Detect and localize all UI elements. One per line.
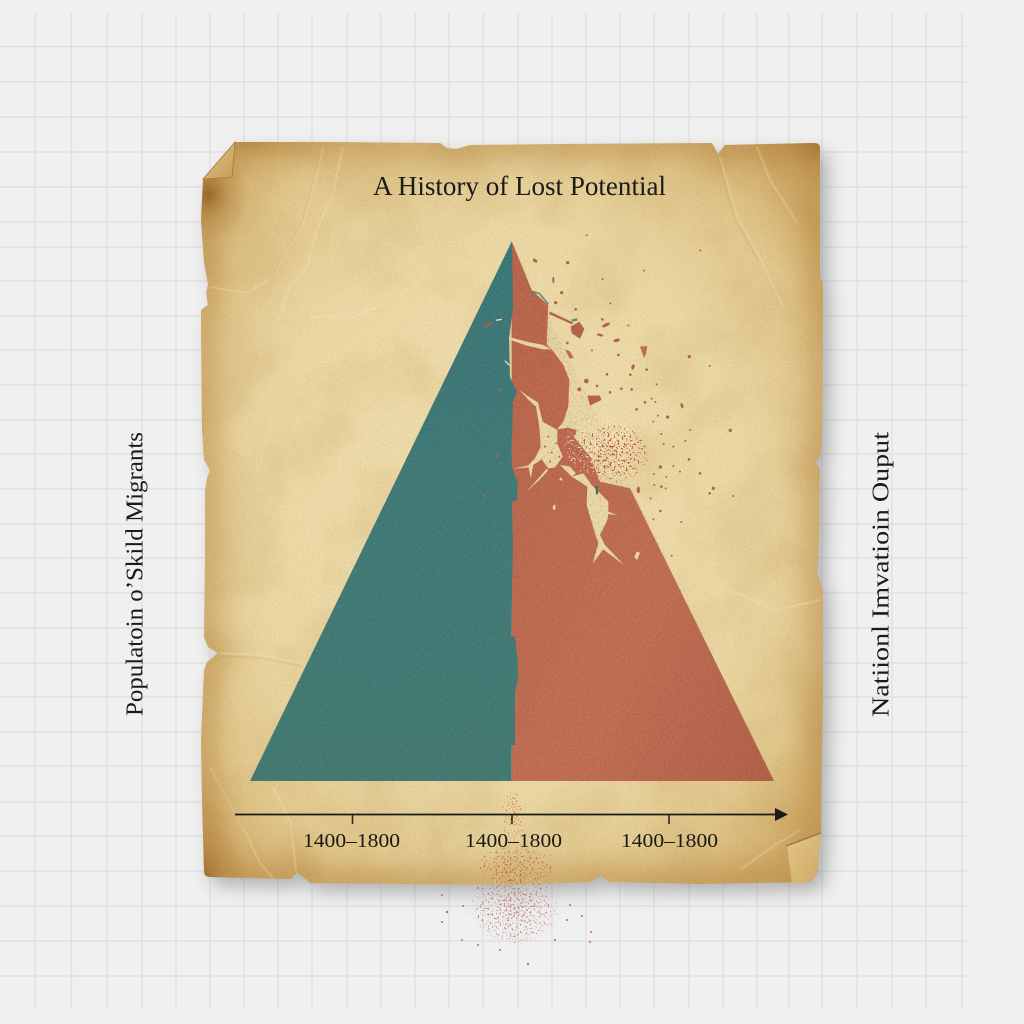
right half: national innovation output bbox=[510, 241, 774, 781]
timeline axis bbox=[235, 808, 788, 852]
right axis label: Natiionl Imvatioin Ouput bbox=[868, 432, 894, 717]
left half: population of skilled migrants bbox=[250, 241, 518, 781]
corner fold top left bbox=[203, 142, 235, 179]
creases in paper bbox=[210, 147, 820, 878]
corner fold bottom right bbox=[786, 833, 821, 884]
left axis label: Populatoin o’Skild Migrants bbox=[122, 432, 148, 716]
particle cloud from the shattered side bbox=[545, 397, 668, 497]
tick label right: 1400–1800 bbox=[621, 830, 718, 852]
arrow head bbox=[775, 808, 788, 821]
cracks bbox=[510, 337, 640, 565]
tick label centre: 1400–1800 bbox=[465, 830, 562, 852]
colour grain on triangle bbox=[245, 236, 780, 786]
panel: aged parchment bbox=[201, 140, 823, 885]
triangle chart: shattering pyramid bbox=[245, 236, 780, 786]
paper shadow bbox=[209, 151, 831, 894]
falling dust below the axis bbox=[441, 779, 592, 965]
debris shards flying off the triangle bbox=[483, 234, 734, 557]
ticks bbox=[352, 815, 669, 824]
tick label left: 1400–1800 bbox=[303, 830, 400, 852]
title: A History of Lost Potential bbox=[373, 171, 666, 201]
